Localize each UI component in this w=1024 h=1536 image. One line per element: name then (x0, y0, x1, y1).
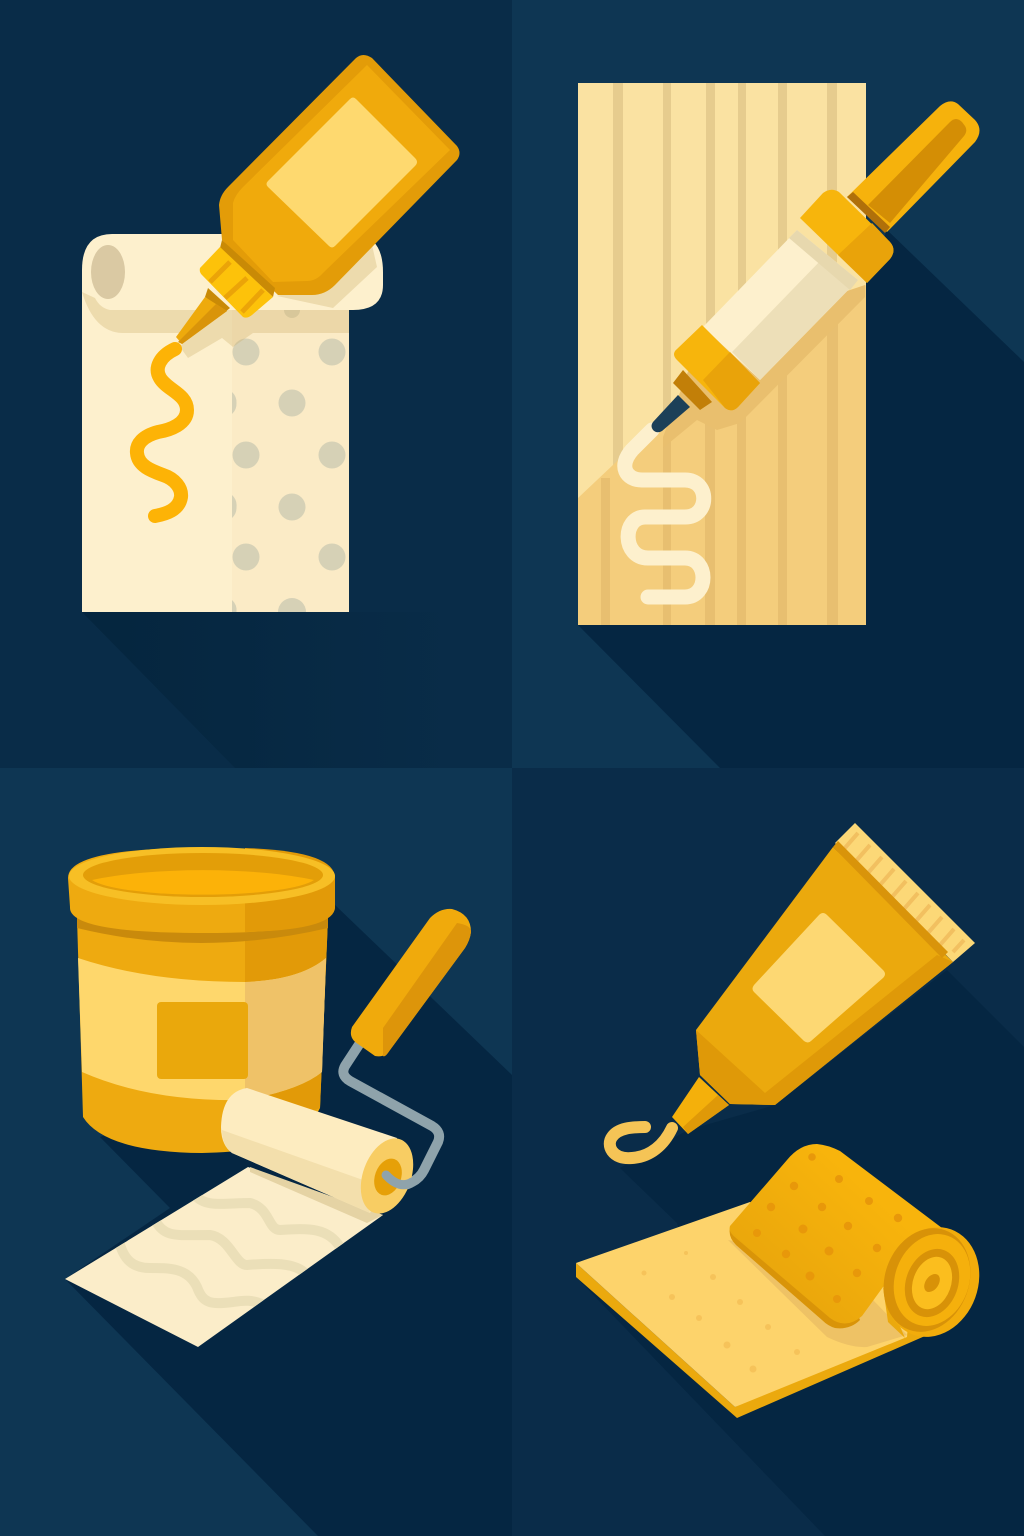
bottle nozzle (205, 288, 230, 312)
tube crimped end (835, 823, 975, 962)
nozzle tip (652, 395, 690, 432)
roll inner hole (91, 245, 125, 299)
tube shadow on panel (663, 285, 865, 448)
roller sleeve (221, 1088, 397, 1213)
foam roll spiral end (869, 1214, 994, 1350)
tube nozzle (672, 1077, 729, 1134)
roller end cap (351, 1131, 423, 1221)
bottle neck band (220, 240, 275, 297)
bucket label band (78, 958, 326, 1100)
roller frame wire (343, 1040, 439, 1185)
tube crimp band (833, 841, 948, 958)
bottle shadow on sheet and roll (180, 245, 377, 358)
icon: paste bucket (68, 847, 335, 1153)
wallpaper dots (232, 338, 346, 612)
striped wall panel (578, 83, 866, 625)
paste waves (118, 1195, 340, 1304)
glue squiggle (137, 349, 187, 516)
foam specks (642, 1251, 800, 1372)
roll shadow band (82, 292, 349, 333)
nozzle neck (673, 370, 712, 410)
roller shadow on sheet (250, 1167, 383, 1223)
half dot under roll (284, 310, 300, 318)
icon: paint roller (221, 909, 471, 1221)
foam sheet edge (576, 1263, 925, 1418)
glue curl (610, 1127, 672, 1158)
panel: caulk tube on striped wall (512, 0, 1024, 768)
bucket rim (68, 848, 335, 933)
icon: foam underlay roll (576, 1144, 994, 1418)
foam roll body (730, 1144, 942, 1324)
panel: adhesive tube and foam roll (512, 768, 1024, 1536)
caulk bead squiggle (625, 430, 704, 597)
icon: caulk tube (652, 101, 980, 432)
top collar (800, 190, 894, 283)
bottle cap (200, 247, 273, 318)
bucket label square (157, 1002, 248, 1079)
long shadow: bucket, roller and sheet (65, 905, 512, 1536)
wallpaper roll (82, 234, 383, 310)
bottle label (266, 98, 417, 248)
roller axle (386, 1175, 412, 1185)
foam roll edge (730, 1155, 860, 1328)
bucket groove (77, 918, 328, 943)
bottom collar (674, 325, 760, 410)
foam sheet (576, 1202, 910, 1407)
roller handle (351, 909, 471, 1056)
wallpaper sheet on floor (65, 1167, 383, 1347)
roll pores (753, 1153, 902, 1303)
tube body (703, 230, 858, 380)
roll shadow on foam (728, 1240, 907, 1347)
wallpaper sheet (82, 234, 383, 612)
long shadow: tube and foam (576, 970, 1024, 1536)
plunger rod (847, 101, 980, 232)
long shadow: wallpaper (82, 612, 512, 768)
panel: glue bottle on dotted wallpaper (0, 0, 512, 768)
icon: glue bottle (176, 55, 460, 344)
tube label (752, 913, 885, 1042)
long shadow: striped panel and tube (578, 230, 1024, 768)
icon: adhesive tube (610, 823, 975, 1158)
panel: paste bucket and roller (0, 768, 512, 1536)
